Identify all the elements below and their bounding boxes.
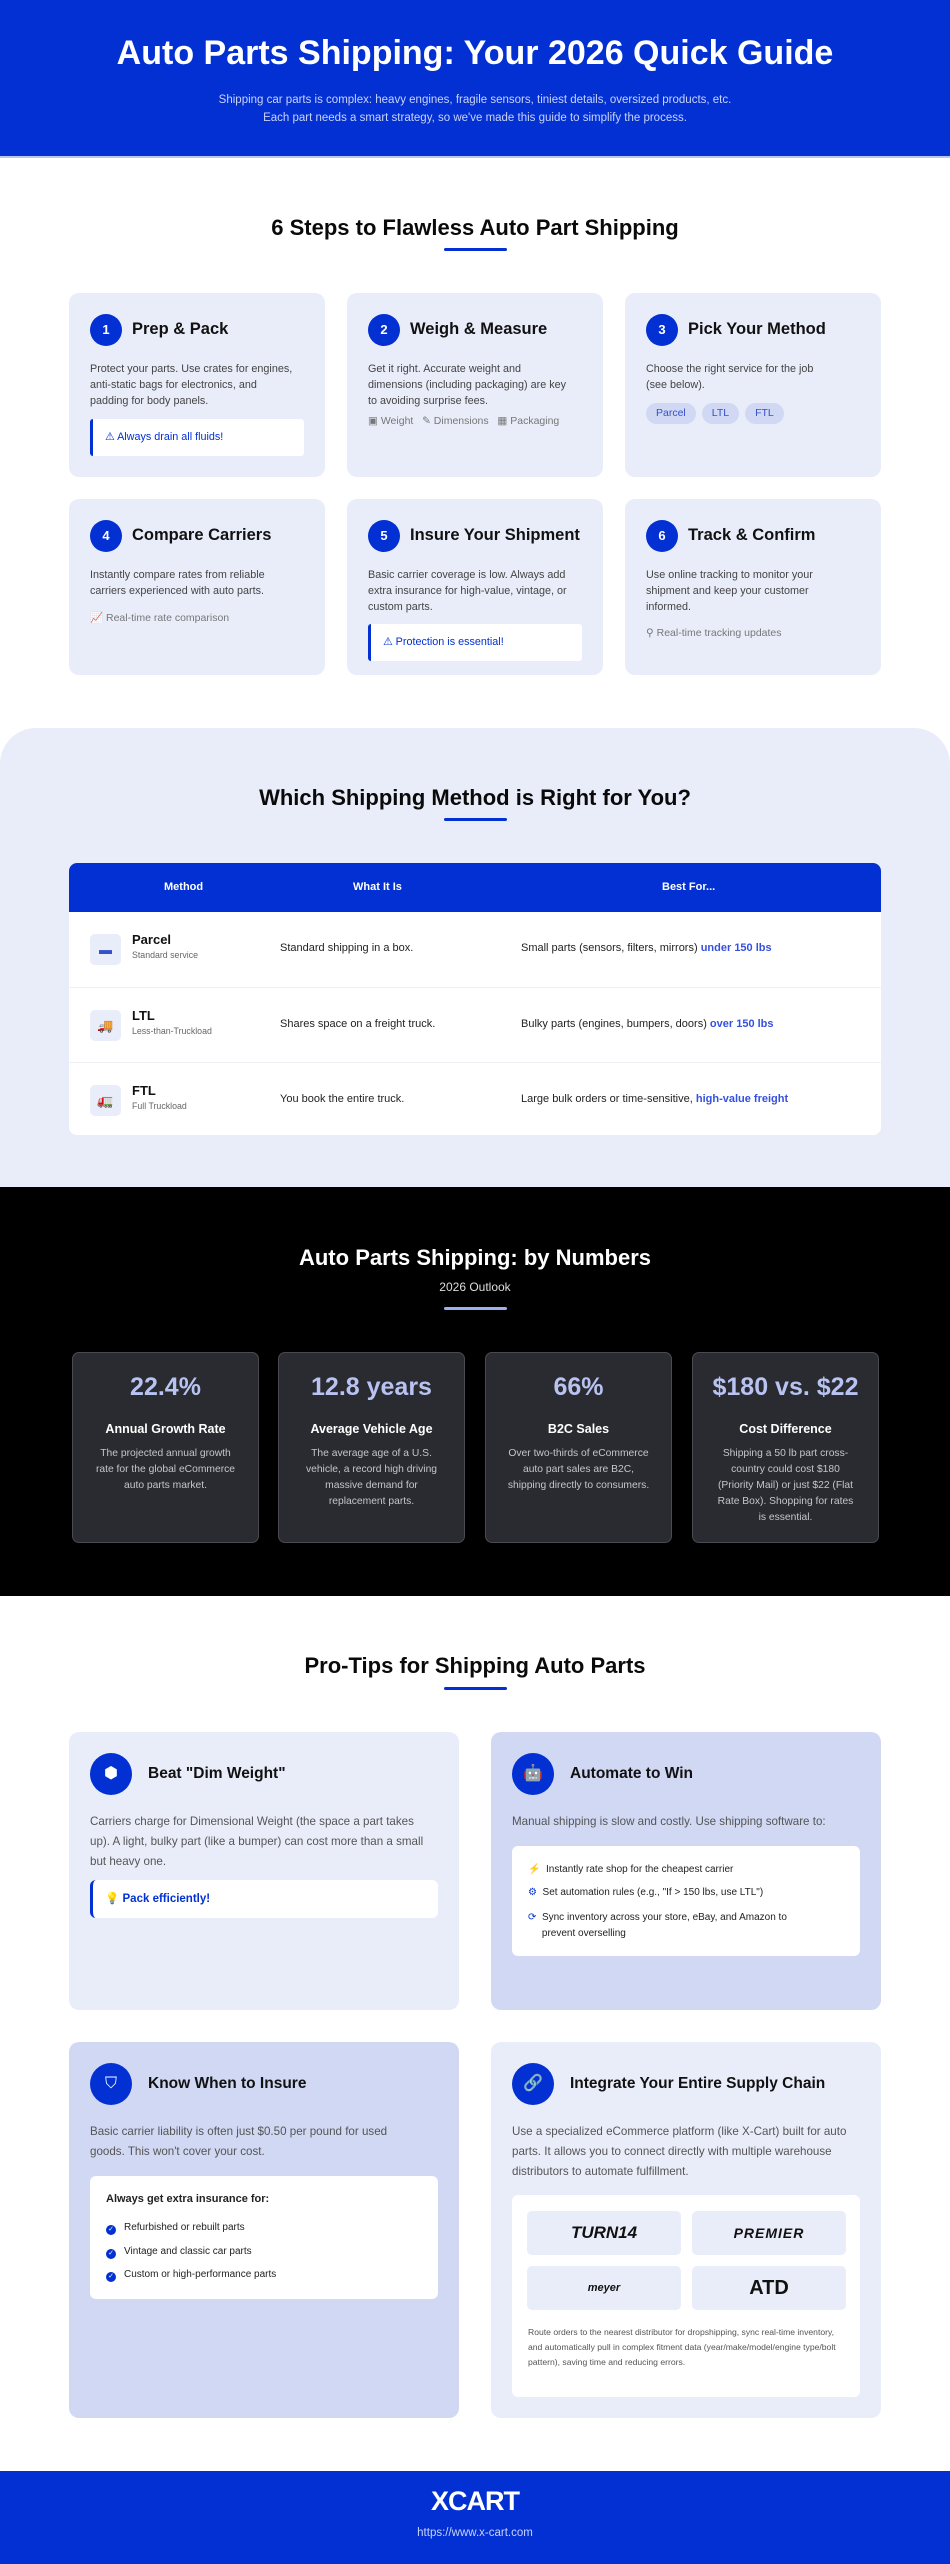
card: step 5	[347, 499, 603, 675]
stat: cost: $180 vs. $22	[712, 1373, 858, 1401]
tags: FTL	[755, 407, 774, 419]
row: FTL: You book the entire truck.	[280, 1093, 404, 1105]
tip: dim weight: Beat "Dim Weight"	[148, 1765, 286, 1782]
card: step 4: 4	[102, 528, 110, 543]
tip: dim weight: ⬢	[104, 1765, 118, 1782]
logos	[527, 2211, 681, 2255]
row: FTL	[69, 1062, 881, 1135]
callout: protection: ⚠ Protection is essential!	[383, 636, 504, 648]
title: Auto Parts Shipping: Your 2026 Quick Guide	[117, 34, 833, 72]
list box: ⟳ Sync inventory across your store, eBay, and Amazon to	[528, 1912, 787, 1923]
tip: automate: Manual shipping is slow and costly. Use shipping software to:	[512, 1815, 826, 1828]
stat: growth: Annual Growth Rate	[105, 1422, 226, 1436]
table	[69, 863, 881, 1135]
row: LTL: Less-than-Truckload	[132, 1026, 212, 1036]
stat: vehicle age: The average age of a U.S. vehicle, a record high driving massive demand for replacement parts.	[306, 1448, 437, 1507]
table header: Best For...	[662, 881, 715, 893]
tip: insure	[69, 2042, 459, 2418]
stat: cost: Cost Difference	[739, 1422, 832, 1436]
tip: integrate: Integrate Your Entire Supply Chain	[570, 2075, 825, 2092]
card: step 3: Choose the right service for the job (see below).	[646, 363, 813, 391]
tags: LTL	[712, 407, 729, 419]
card: step 6	[625, 499, 881, 675]
card: step 2: Get it right. Accurate weight and dimensions (including packaging) are key to avoiding surprise fees.	[368, 363, 566, 407]
tip: insure: Know When to Insure	[148, 2075, 306, 2092]
table header: What It Is	[353, 881, 402, 893]
row: parcel: Parcel	[132, 932, 171, 947]
card: step 6: 6	[658, 528, 666, 543]
card: step 4: 📈 Real-time rate comparison	[90, 612, 229, 624]
card: step 6: ⚲ Real-time tracking updates	[646, 627, 782, 639]
subtitle: Each part needs a smart strategy, so we've made this guide to simplify the process.	[263, 112, 687, 124]
stat: B2C: B2C Sales	[548, 1422, 609, 1436]
row: parcel: Standard shipping in a box.	[280, 942, 413, 954]
list box: ⚡ Instantly rate shop for the cheapest carrier	[528, 1864, 733, 1875]
card: step 1	[69, 293, 325, 477]
tip: dim weight: Carriers charge for Dimensional Weight (the space a part takes up). A light, bulky part (like a bumper) can cost more than a small but heavy one.	[90, 1815, 423, 1868]
distributors box: Route orders to the nearest distributor for dropshipping, sync real-time inventory, and automatically pull in complex fitment data (year/make/model/engine type/bolt pattern), saving time and reducing errors.	[528, 2327, 836, 2367]
distributors box: meyer	[588, 2282, 620, 2294]
stat: vehicle age: 12.8 years	[311, 1373, 432, 1401]
card: step 2	[347, 293, 603, 477]
card: step 2: ▣ Weight ✎ Dimensions ▦ Packaging	[368, 415, 559, 427]
table header: Method	[164, 881, 203, 893]
row: FTL: Full Truckload	[132, 1101, 187, 1111]
list box: prevent overselling	[542, 1928, 626, 1939]
stat: vehicle age	[278, 1352, 465, 1543]
subtitle	[219, 94, 731, 124]
stat: cost	[692, 1352, 879, 1543]
callout: protection	[368, 624, 582, 661]
tags: Parcel	[656, 407, 686, 419]
row: parcel: Standard service	[132, 950, 198, 960]
insurance list: ✓	[108, 2226, 114, 2233]
distributors box: ATD	[749, 2277, 789, 2299]
stat: vehicle age: Average Vehicle Age	[310, 1422, 433, 1436]
card: step 5: Basic carrier coverage is low. Always add extra insurance for high-value, vintage, or custom parts.	[368, 569, 567, 613]
subheading: 2026 Outlook	[439, 1280, 511, 1294]
callout: drain fluids	[90, 419, 304, 456]
card: step 3	[625, 293, 881, 477]
row: LTL	[69, 987, 881, 1062]
callout: pack efficiently: 💡 Pack efficiently!	[105, 1893, 210, 1905]
row: parcel: ▬	[99, 942, 112, 957]
tip: integrate	[491, 2042, 881, 2418]
row: FTL: Large bulk orders or time-sensitive, high-value freight	[521, 1093, 788, 1105]
tip: automate: Automate to Win	[570, 1765, 693, 1782]
card: step 4: Instantly compare rates from reliable carriers experienced with auto parts.	[90, 569, 265, 597]
row: LTL: Bulky parts (engines, bumpers, doors) over 150 lbs	[521, 1018, 774, 1030]
card: step 1: Prep & Pack	[132, 320, 228, 338]
list box: ⚙ Set automation rules (e.g., "If > 150 lbs, use LTL")	[528, 1887, 763, 1898]
logo text: XCART	[431, 2486, 519, 2516]
distributors box: PREMIER	[734, 2225, 804, 2241]
logos: TURN14	[571, 2223, 637, 2242]
card: step 3: 3	[658, 322, 666, 337]
callout: drain fluids: ⚠ Always drain all fluids!	[105, 431, 223, 443]
stat: growth: 22.4%	[130, 1373, 201, 1401]
stat: B2C: 66%	[553, 1373, 604, 1401]
section: by numbers	[0, 1187, 950, 1596]
row: LTL: Shares space on a freight truck.	[280, 1018, 435, 1030]
card: step 6: Use online tracking to monitor your shipment and keep your customer informed.	[646, 569, 813, 613]
row: parcel: Small parts (sensors, filters, mirrors) under 150 lbs	[521, 942, 772, 954]
insurance list: Vintage and classic car parts	[124, 2246, 252, 2257]
tags	[646, 403, 784, 424]
tip: insure: ⛉	[105, 2075, 117, 2092]
card: step 2: Weigh & Measure	[410, 320, 547, 338]
table header	[69, 863, 881, 912]
tip: dim weight	[69, 1732, 459, 2010]
stat: growth	[72, 1352, 259, 1543]
tip: integrate: Use a specialized eCommerce platform (like X-Cart) built for auto parts. It allows you to connect directly with multiple warehouse distributors to automate fulfillment.	[512, 2125, 846, 2178]
card: step 3: Pick Your Method	[688, 320, 826, 338]
card: step 1: Protect your parts. Use crates for engines, anti-static bags for electronics, and padding for body panels.	[90, 363, 292, 407]
tip: automate: 🤖	[523, 1765, 543, 1782]
tip: insure: Basic carrier liability is often just $0.50 per pound for used goods. This won't cover your cost.	[90, 2125, 387, 2158]
insurance list: ✓	[108, 2250, 114, 2257]
tip: integrate: 🔗	[523, 2075, 543, 2092]
insurance list: Custom or high-performance parts	[124, 2269, 276, 2280]
stat: growth: The projected annual growth rate for the global eCommerce auto parts market.	[96, 1448, 235, 1491]
card: step 2: 2	[380, 322, 388, 337]
stat: B2C	[485, 1352, 672, 1543]
header banner	[0, 0, 950, 158]
card: step 5: 5	[380, 528, 388, 543]
card: step 1: 1	[102, 322, 110, 337]
heading: 6 steps: 6 Steps to Flawless Auto Part Shipping	[271, 215, 679, 240]
stat: cost: Shipping a 50 lb part cross-country could cost $180 (Priority Mail) or just $22 (Flat Rate Box). Shopping for rates is essential.	[718, 1448, 853, 1523]
card: step 6: Track & Confirm	[688, 526, 815, 544]
row: FTL: FTL	[132, 1083, 156, 1098]
row: LTL: 🚚	[97, 1018, 114, 1033]
row: parcel	[69, 912, 881, 987]
section: shipping methods	[0, 728, 950, 1187]
insurance list: Refurbished or rebuilt parts	[124, 2222, 245, 2233]
insurance list	[90, 2176, 438, 2299]
insurance list: ✓	[108, 2273, 114, 2280]
heading: Auto Parts Shipping: by Numbers	[299, 1245, 651, 1270]
stat: B2C: Over two-thirds of eCommerce auto part sales are B2C, shipping directly to consumers.	[508, 1448, 649, 1491]
list box	[512, 1846, 860, 1956]
footer	[0, 2471, 950, 2564]
insurance list: Always get extra insurance for:	[106, 2193, 269, 2205]
tip: automate	[491, 1732, 881, 2010]
url: https://www.x-cart.com	[417, 2527, 533, 2539]
card: step 4	[69, 499, 325, 675]
row: FTL: 🚛	[97, 1093, 114, 1108]
subtitle: Shipping car parts is complex: heavy engines, fragile sensors, tiniest details, oversized products, etc.	[219, 94, 731, 106]
heading: pro tips: Pro-Tips for Shipping Auto Parts	[304, 1653, 646, 1678]
callout: pack efficiently	[90, 1880, 438, 1918]
distributors box	[512, 2195, 860, 2397]
card: step 4: Compare Carriers	[132, 526, 271, 544]
card: step 5: Insure Your Shipment	[410, 526, 580, 544]
row: LTL: LTL	[132, 1008, 155, 1023]
heading: Which Shipping Method is Right for You?	[259, 785, 691, 810]
